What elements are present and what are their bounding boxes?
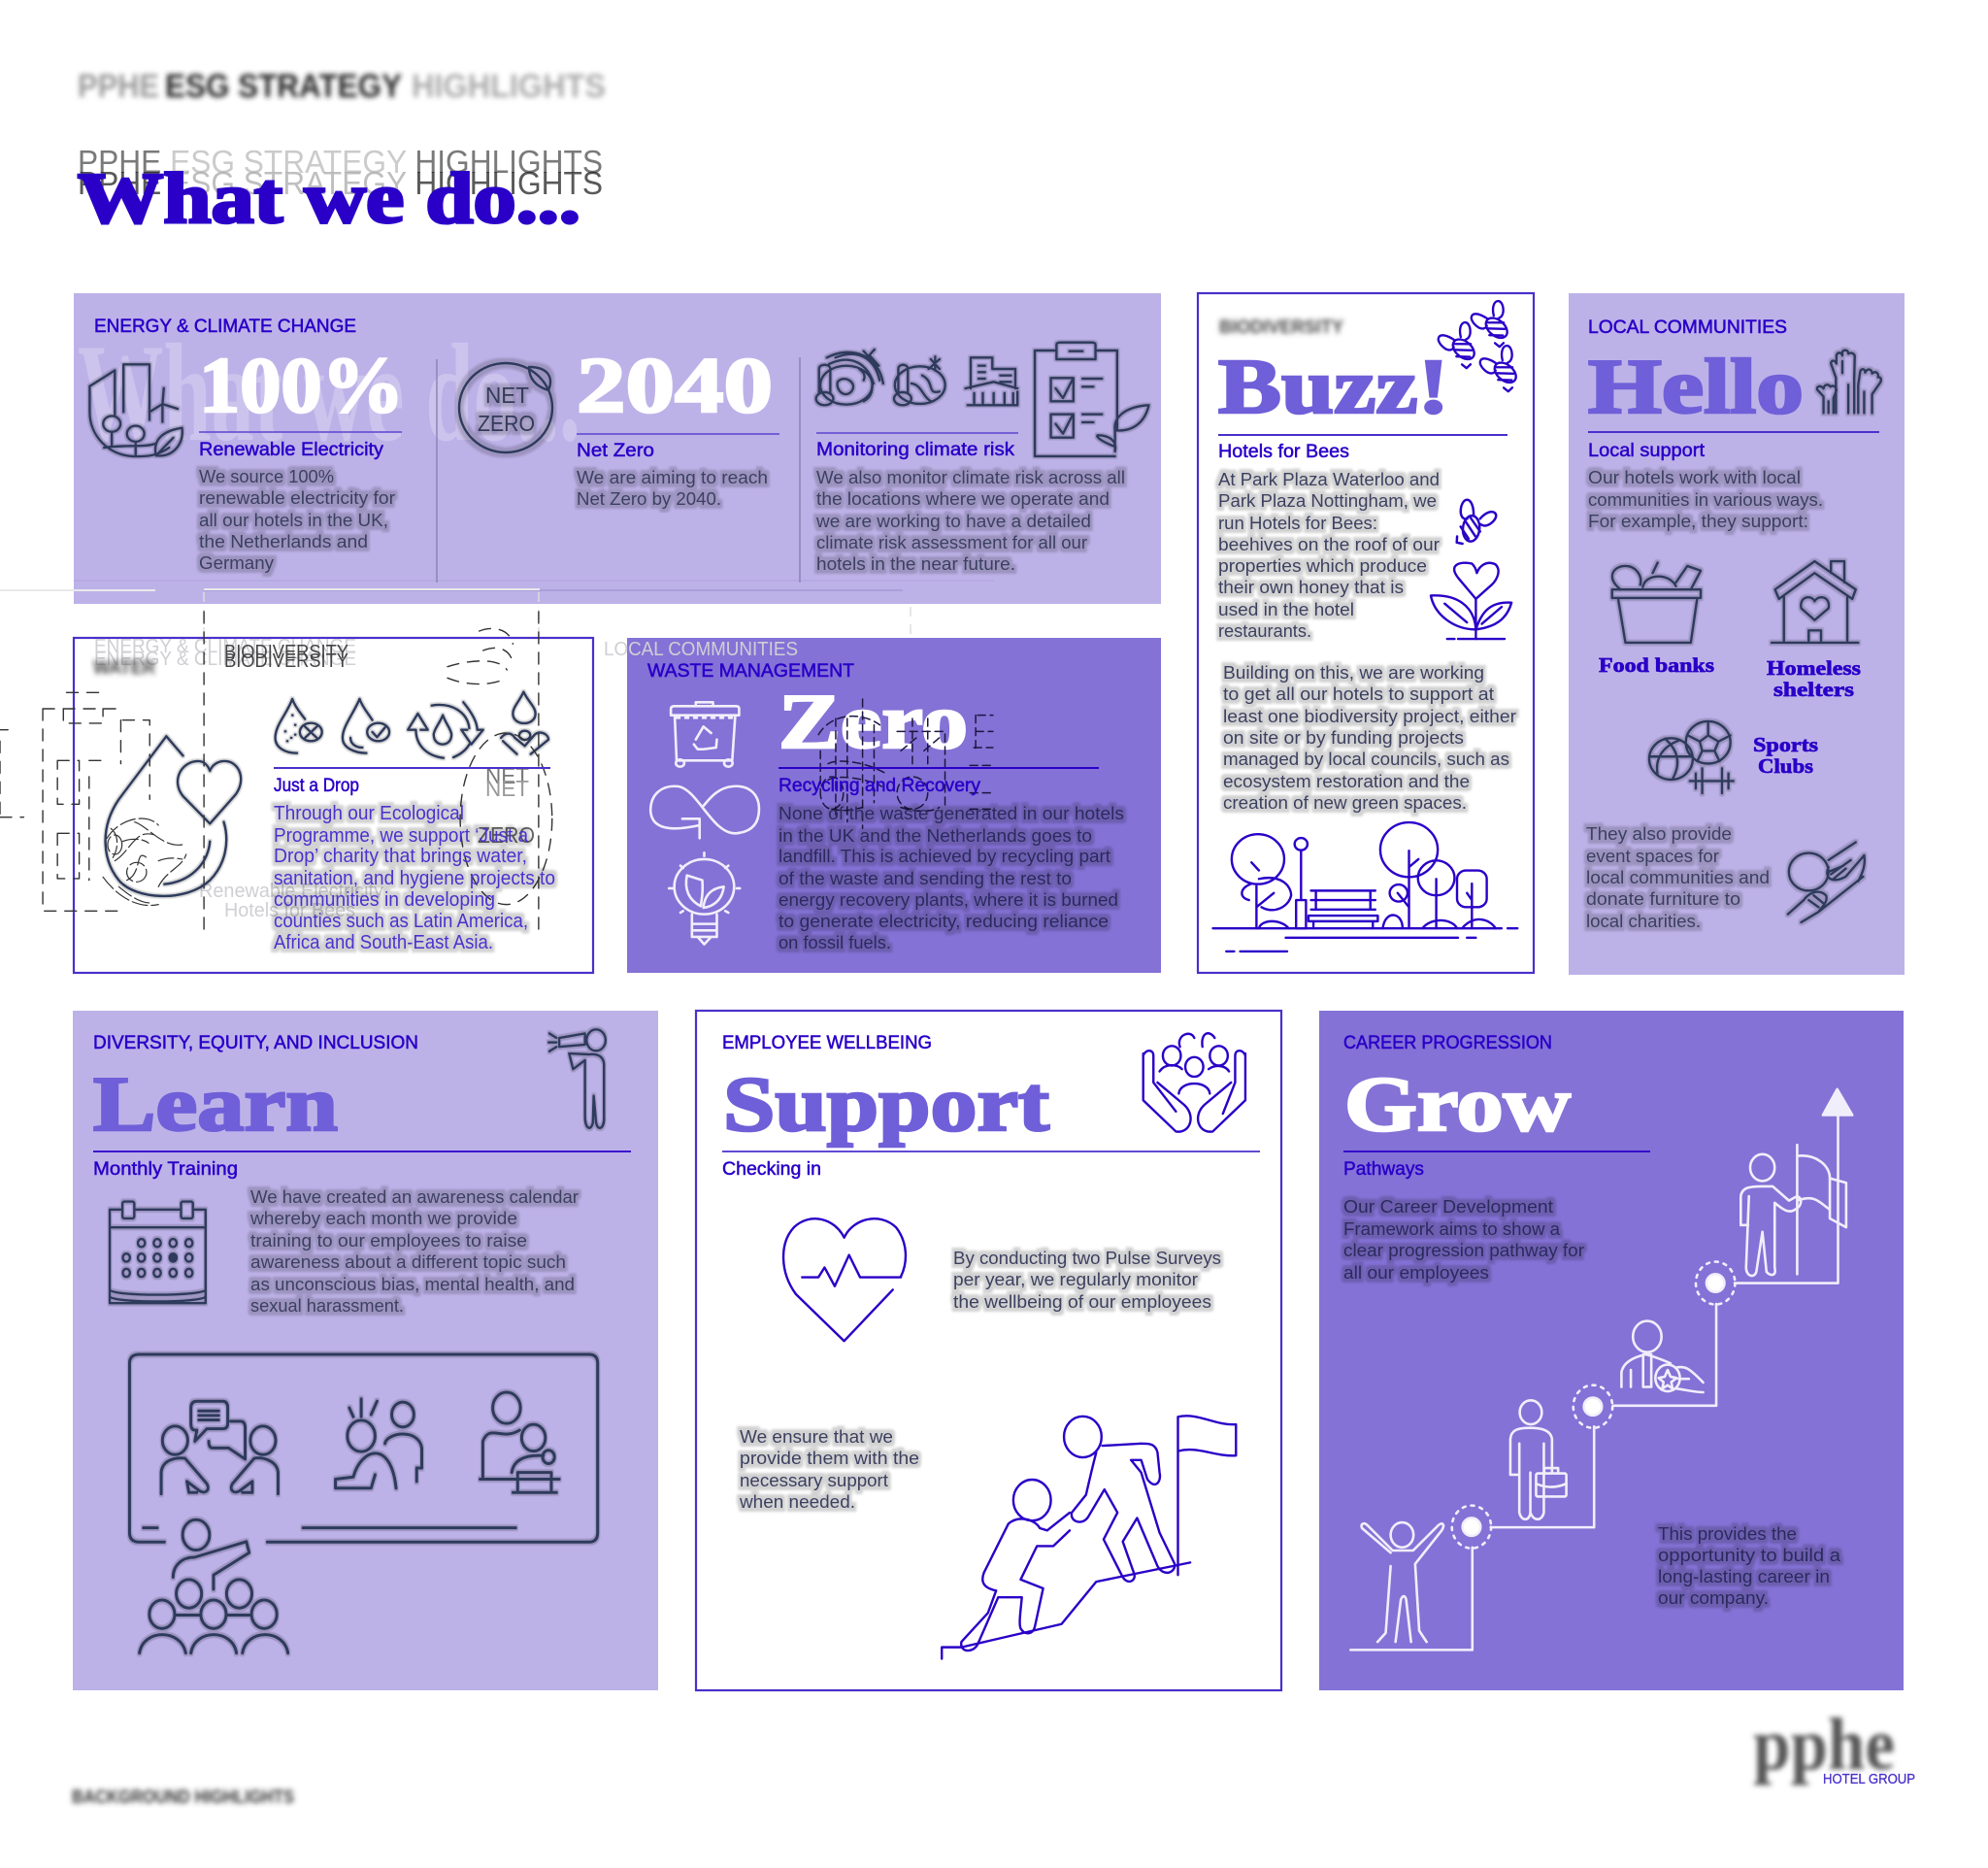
icon: leaf bulb <box>669 852 740 945</box>
text: local outro: They also provide <box>1586 823 1732 844</box>
icon: drop and heart <box>106 736 241 896</box>
icon: net zero: NET <box>485 383 529 408</box>
subheading: net zero: Net Zero <box>577 440 654 461</box>
section label: ENERGY & CLIMATE CHANGE <box>94 316 356 337</box>
text: monitoring body: hotels in the near future. <box>816 553 1015 574</box>
subheading: pathways: Pathways <box>1343 1158 1424 1180</box>
section label: CAREER PROGRESSION <box>1343 1032 1552 1053</box>
icon: net zero <box>459 363 552 452</box>
text: bees body one <box>1218 469 1440 641</box>
icon: raised hands <box>1817 350 1881 413</box>
text: net zero body <box>577 467 768 509</box>
text: bees body one: used in the hotel <box>1218 599 1354 619</box>
ghost labels: ENERGY & CLIMATE CHANGE <box>94 649 356 670</box>
subheading: local support: Local support <box>1588 440 1706 461</box>
icon: figure with megaphone <box>548 1029 606 1128</box>
text: learn body: awareness about a different topic such <box>250 1251 566 1272</box>
figure: award <box>1621 1321 1704 1392</box>
subheading: checking in: Checking in <box>722 1158 821 1180</box>
text: waste body: to generate electricity, reducing reliance <box>779 911 1109 931</box>
figures: laptop <box>480 1392 559 1492</box>
icon: park scene <box>1212 822 1517 951</box>
text: bees body one: properties which produce <box>1218 555 1427 576</box>
icon: net zero: ZERO <box>478 411 535 436</box>
icon: presentation board <box>129 1354 598 1653</box>
text: renewable body: all our hotels in the UK, <box>199 510 388 530</box>
text: renewable body <box>199 466 395 573</box>
ghost net zero text: NET <box>485 763 529 788</box>
subheading: monthly training: Monthly Training <box>93 1158 238 1180</box>
text: renewable body: Germany <box>199 552 275 573</box>
label: food banks: Food banks <box>1599 653 1714 677</box>
ghost net zero text: NET <box>485 776 529 801</box>
text: career body two: This provides the <box>1658 1523 1797 1544</box>
figures: teacher and audience <box>140 1519 288 1653</box>
text: net zero body: Net Zero by 2040. <box>577 488 721 509</box>
text: waste body <box>779 803 1124 952</box>
icon: climbers with flag <box>942 1416 1236 1659</box>
icon: three bees <box>1436 300 1527 397</box>
text: local intro: For example, they support: <box>1588 511 1808 531</box>
text: local outro: event spaces for <box>1586 846 1719 866</box>
panel: energy and climate change <box>74 293 1161 604</box>
icon: hands holding people <box>1143 1033 1245 1132</box>
logo: pphe hotel group: HOTEL GROUP <box>1823 1772 1915 1787</box>
panel: career progression <box>1319 1011 1904 1690</box>
text: local outro <box>1586 823 1770 931</box>
title: blurred strapline: ESG STRATEGY <box>165 68 402 105</box>
figure: briefcase <box>1510 1400 1567 1519</box>
text: learn body: sexual harassment. <box>250 1295 404 1316</box>
text: bees body one: restaurants. <box>1218 620 1311 641</box>
text: biodiversity body: Drop’ charity that brings water, <box>274 846 527 867</box>
text: bees body one: run Hotels for Bees: <box>1218 513 1377 533</box>
figures: confrontation <box>336 1399 422 1488</box>
text: learn body: We have created an awareness calendar <box>250 1186 579 1207</box>
text: biodiversity body: Through our Ecological <box>274 803 464 824</box>
text: career body two <box>1658 1523 1841 1608</box>
text: bees body two <box>1223 662 1516 813</box>
text: career body one: Our Career Development <box>1343 1196 1553 1217</box>
icon: heart flower <box>1431 563 1511 639</box>
text: bees body two: to get all our hotels to support at <box>1223 684 1494 704</box>
text: monitoring body: we are working to have a detailed <box>815 511 1091 531</box>
panel: biodiversity <box>0 612 593 973</box>
icon: calendar <box>110 1202 206 1303</box>
label: sports clubs: Clubs <box>1758 754 1813 778</box>
heading: learn: Learn <box>93 1062 338 1148</box>
subheading: hotels for bees: Hotels for Bees <box>1218 441 1349 462</box>
subheading: just a drop: Just a Drop <box>274 775 359 796</box>
text: monitoring body: the locations where we operate and <box>816 488 1110 509</box>
text: net zero body: We are aiming to reach <box>577 467 768 487</box>
ghost net zero text: ZERO <box>478 822 535 848</box>
text: bees body two: creation of new green spaces. <box>1223 792 1467 813</box>
icon: infinity arrow <box>650 786 759 838</box>
text: learn body: training to our employees to raise <box>250 1230 527 1251</box>
main heading: What we do... <box>78 159 580 239</box>
text: pulse surveys: By conducting two Pulse Surveys <box>953 1248 1221 1268</box>
text: bees body one: beehives on the roof of our <box>1218 534 1440 554</box>
label: blurred section: BIODIVERSITY <box>1219 317 1343 338</box>
ghost labels: Hotels for Bees <box>224 900 355 921</box>
text: career body one: clear progression pathway for <box>1343 1240 1584 1260</box>
icon: heart pulse <box>783 1218 906 1341</box>
title: blurred strapline: HIGHLIGHTS <box>412 68 606 105</box>
text: biodiversity body <box>274 803 555 953</box>
ghost labels <box>94 636 383 921</box>
heading: buzz: Buzz! <box>1218 345 1449 430</box>
ghost heading: What we do... <box>78 316 580 470</box>
heading: hello: Hello <box>1588 345 1804 430</box>
text: bees body two: on site or by funding projects <box>1223 727 1464 748</box>
text: career body two: long-lasting career in <box>1658 1566 1830 1586</box>
text: support when needed: necessary support <box>740 1470 888 1490</box>
text: bees body two: Building on this, we are working <box>1223 662 1484 683</box>
section label: EMPLOYEE WELLBEING <box>722 1032 932 1053</box>
text: career body one <box>1343 1196 1584 1283</box>
text: bees body one: Park Plaza Nottingham, we <box>1218 490 1437 511</box>
icons: water row <box>276 692 548 758</box>
icon: green city <box>89 364 182 456</box>
text: biodiversity body: Africa and South-East Asia. <box>274 932 493 953</box>
icon: helping hands heart <box>1788 842 1865 922</box>
text: learn body: whereby each month we provide <box>249 1208 517 1228</box>
label: blurred section: WATER <box>93 657 156 679</box>
text: bees body two: ecosystem restoration and the <box>1223 771 1470 791</box>
ghost local communities: LOCAL COMMUNITIES <box>604 639 798 660</box>
text: pulse surveys: per year, we regularly monitor <box>953 1269 1198 1289</box>
text: learn body <box>249 1186 579 1316</box>
text: local outro: local charities. <box>1586 911 1701 931</box>
text: renewable body: the Netherlands and <box>199 531 368 551</box>
text: pulse surveys <box>953 1248 1221 1312</box>
icon: clipboard with leaf <box>1035 343 1148 456</box>
ghost net zero text <box>478 763 535 848</box>
section label: LOCAL COMMUNITIES <box>1588 317 1787 338</box>
figure: flag bearer <box>1740 1145 1846 1276</box>
section label: DIVERSITY, EQUITY, AND INCLUSION <box>93 1032 418 1053</box>
text: biodiversity body: sanitation, and hygiene projects to <box>274 868 555 889</box>
text: waste body: landfill. This is achieved by recycling part <box>779 846 1110 866</box>
panel: diversity, equity and inclusion <box>73 1011 658 1690</box>
subheading: renewable electricity: Renewable Electricity <box>199 439 383 460</box>
text: waste body: in the UK and the Netherlands goes to <box>779 825 1092 846</box>
icon: heart house <box>1772 561 1858 643</box>
ghost layer behind lower panels <box>0 589 911 641</box>
text: support when needed: when needed. <box>739 1491 855 1512</box>
text: bees body two: least one biodiversity project, either <box>1223 706 1516 726</box>
ghost labels: Renewable Electricity <box>199 881 383 902</box>
text: support when needed: provide them with the <box>740 1448 919 1468</box>
subheading: recycling: Recycling and Recovery <box>779 775 980 796</box>
text: bees body one: their own honey that is <box>1218 577 1404 597</box>
title: blurred strapline <box>78 68 606 105</box>
text: biodiversity body: counties such as Latin America, <box>274 911 528 932</box>
title: sliced strapline: PPHE ESG STRATEGY HIGHLIGHTS <box>78 144 603 180</box>
text: local intro: communities in various ways. <box>1588 489 1823 510</box>
icons: climate risk <box>816 350 1017 405</box>
label: homeless shelters <box>1767 656 1861 701</box>
text: monitoring body <box>815 467 1125 574</box>
text: career body two: our company. <box>1658 1587 1769 1608</box>
figure: arms raised <box>1362 1522 1443 1642</box>
text: learn body: as unconscious bias, mental health, and <box>250 1274 575 1294</box>
text: waste body: on fossil fuels. <box>779 932 891 952</box>
subheading: monitoring climate risk: Monitoring climate risk <box>816 439 1014 460</box>
icon: food basket <box>1612 563 1701 643</box>
text: renewable body: We source 100% <box>199 466 334 486</box>
panel: local communities <box>1569 293 1905 975</box>
text: waste body: None of the waste generated in our hotels <box>779 803 1124 823</box>
text: support when needed <box>739 1426 919 1512</box>
chart: career staircase <box>1350 1089 1852 1650</box>
title: sliced strapline: PPHE ESG STRATEGY HIGHLIGHTS <box>78 165 603 201</box>
stat: 100%: 100% <box>199 341 404 429</box>
ghost scribble <box>818 699 993 828</box>
text: career body two: opportunity to build a <box>1658 1545 1841 1565</box>
panel: hotels for bees <box>1198 293 1534 973</box>
ghost labels: ENERGY & CLIMATE CHANGE <box>94 636 356 657</box>
title: blurred strapline: PPHE <box>78 68 159 105</box>
text: local intro: Our hotels work with local <box>1588 467 1801 487</box>
text: bees body one: At Park Plaza Waterloo and <box>1218 469 1440 489</box>
section label: BIODIVERSITY <box>224 650 348 672</box>
heading: grow: Grow <box>1344 1062 1571 1148</box>
title: sliced strapline <box>78 144 603 201</box>
text: monitoring body: We also monitor climate risk across all <box>816 467 1125 487</box>
stat: 2040: 2040 <box>577 341 773 429</box>
section label: WASTE MANAGEMENT <box>647 660 854 682</box>
text: local outro: donate furniture to <box>1586 888 1740 909</box>
text: local outro: local communities and <box>1586 867 1770 887</box>
logo: pphe hotel group: pphe <box>1753 1704 1895 1785</box>
text: career body one: Framework aims to show a <box>1343 1218 1561 1239</box>
text: biodiversity body: communities in developing <box>274 889 495 911</box>
label: sports clubs <box>1753 733 1818 778</box>
heading: support: Support <box>723 1062 1049 1148</box>
label: homeless shelters: Homeless <box>1767 656 1861 680</box>
panel: waste management <box>604 638 1161 973</box>
text: waste body: of the waste and sending the rest to <box>779 868 1072 888</box>
text: renewable body: renewable electricity for <box>199 487 395 508</box>
icon: brain scribble <box>103 818 186 906</box>
section label <box>224 642 348 672</box>
icon: sports balls <box>1649 721 1734 793</box>
icon: bee <box>1444 496 1498 553</box>
label: sports clubs: Sports <box>1753 733 1818 756</box>
panel: employee wellbeing <box>696 1011 1281 1690</box>
heading: zero: Zero <box>779 680 968 765</box>
section label: BIODIVERSITY <box>224 642 348 663</box>
text: pulse surveys: the wellbeing of our employees <box>953 1291 1211 1312</box>
figures: discussion <box>161 1401 278 1494</box>
ghost net zero <box>447 628 552 905</box>
text: career body one: all our employees <box>1343 1262 1489 1283</box>
text: biodiversity body: Programme, we support ‘Just a <box>274 825 529 847</box>
text: support when needed: We ensure that we <box>740 1426 893 1447</box>
text: waste body: energy recovery plants, where it is burned <box>779 889 1118 910</box>
footer: blurred source line: BACKGROUND HIGHLIGHTS <box>72 1787 294 1808</box>
label: homeless shelters: shelters <box>1773 678 1854 701</box>
text: local intro <box>1588 467 1823 531</box>
text: bees body two: managed by local councils, such as <box>1223 749 1509 769</box>
ghost dashed clipboard <box>0 612 539 935</box>
text: monitoring body: climate risk assessment for all our <box>816 532 1087 552</box>
icon: recycling bin <box>671 702 739 767</box>
